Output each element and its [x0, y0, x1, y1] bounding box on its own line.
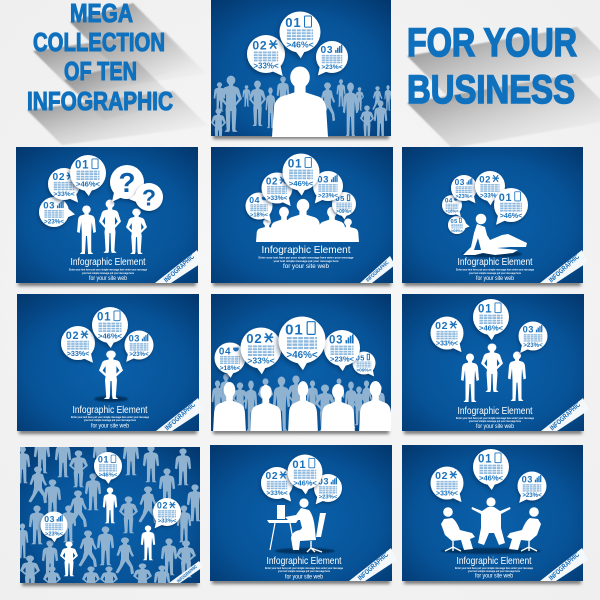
bubble 02: >33%< — [480, 192, 500, 199]
bubble 03: 03 — [320, 45, 333, 56]
bubble 01: 01 — [288, 157, 302, 171]
corner ribbon: INFOGRAPHIC — [176, 564, 199, 584]
bubble 05: 05 — [356, 353, 365, 362]
bubble 02: 02 — [435, 470, 448, 482]
bubble 01: 01 — [97, 312, 111, 324]
bubble 03 — [314, 474, 342, 504]
bubble 02 — [430, 466, 464, 502]
bubble 03: >23%< — [455, 194, 473, 200]
panel: single figure — [17, 294, 204, 434]
bubble 02: >33%< — [67, 350, 89, 358]
caption: your text simple message put your message here — [469, 271, 521, 275]
bubble 01 — [288, 454, 322, 494]
bubble 05: 05 — [335, 194, 345, 203]
caption: your text simple message put your message here — [82, 271, 134, 275]
panel: top crowd with large figure — [211, 0, 392, 143]
panel: person at desk — [210, 445, 397, 584]
bubble 02: >33%< — [267, 195, 288, 202]
bubble 03: >23%< — [321, 64, 343, 71]
bubble 01 — [473, 299, 509, 340]
bubble 02 — [262, 172, 292, 206]
bubble 04: >18%< — [220, 365, 241, 372]
bubble 03: 03 — [129, 334, 140, 344]
bubble 02: 02 — [52, 172, 65, 183]
bubble 02 — [247, 35, 285, 76]
bubble 03: >23%< — [330, 355, 355, 364]
bubble 02: 02 — [252, 38, 267, 52]
bubble 01 — [494, 188, 528, 225]
long shadow: right heading — [407, 27, 600, 148]
bubble 02: 02 — [265, 471, 278, 482]
corner ribbon: INFOGRAPHIC — [549, 402, 582, 432]
bubble 01: 01 — [75, 160, 89, 172]
figures — [77, 200, 147, 254]
bubble 02: >33%< — [253, 61, 279, 70]
bubble 03 — [39, 197, 75, 227]
bubble 01: >46%< — [500, 212, 522, 220]
bubble 02: >33%< — [53, 191, 75, 198]
bubble 03 — [124, 330, 154, 362]
crowd silhouettes — [211, 76, 391, 136]
caption: for your site web — [476, 276, 515, 282]
bubble 01 — [94, 452, 122, 484]
bubble 01: 01 — [478, 454, 492, 466]
seated figure — [463, 214, 527, 255]
left seated person — [441, 507, 475, 551]
heading: for your business — [407, 21, 577, 112]
bubble 01: 01 — [285, 321, 304, 338]
bubble 03: 03 — [44, 514, 55, 524]
bubble 01: >46%< — [99, 473, 118, 479]
caption: Enter your text here put your simple message here enter your message — [69, 268, 147, 272]
bubble 01: 01 — [285, 15, 301, 30]
caption — [69, 256, 147, 282]
caption — [455, 555, 533, 580]
heading: mega collection of ten infographic: OF TEN — [64, 56, 137, 86]
bubble question small — [129, 183, 163, 211]
bubble 01: 01 — [292, 459, 306, 471]
bubble 02 — [61, 326, 95, 363]
bubble 05 — [448, 216, 470, 234]
bubble 01: 01 — [478, 304, 492, 316]
bubble 03: >23%< — [45, 531, 64, 537]
caption — [258, 244, 354, 270]
caption: your text simple message put your message here — [278, 569, 330, 573]
bubble 01 — [473, 449, 509, 490]
figure — [99, 350, 123, 399]
bubble 05 — [332, 192, 356, 219]
bubble 02: >33%< — [436, 341, 458, 348]
panel: five busts — [211, 147, 395, 286]
large white figure — [272, 66, 328, 137]
caption: your text simple message put your message here — [468, 569, 520, 573]
bubble 05: 05 — [451, 219, 458, 225]
figures — [256, 199, 359, 242]
bubble 02: 02 — [157, 501, 168, 511]
caption — [456, 256, 534, 282]
bubble 01 — [70, 155, 106, 196]
bubble 05: >09%< — [356, 368, 372, 374]
bubble 02: 02 — [266, 176, 278, 187]
bubble 01 — [280, 12, 320, 58]
caption: Infographic Element — [262, 244, 351, 256]
caption: your text simple message put your message here — [274, 259, 339, 263]
figure shadow — [94, 396, 128, 402]
panel: three figures with question marks — [16, 147, 203, 286]
corner ribbon: INFOGRAPHIC — [163, 254, 196, 284]
caption: Infographic Element — [266, 555, 342, 567]
bubble 01 — [278, 316, 326, 370]
bubble question small: ? — [142, 184, 156, 210]
caption: Infographic Element — [456, 555, 532, 567]
bubble 01: >46%< — [98, 332, 123, 341]
bubble 03: >23%< — [44, 218, 64, 225]
bubble 01: >46%< — [293, 478, 317, 487]
corner ribbon: INFOGRAPHIC — [357, 552, 390, 582]
bubble 03: 03 — [522, 475, 533, 485]
right seated person — [507, 507, 541, 551]
bubble 02: 02 — [479, 174, 491, 185]
bubble 02 — [48, 168, 80, 203]
bubble 03: >23%< — [319, 495, 338, 501]
caption: for your site web — [475, 574, 514, 580]
bubble 03: 03 — [455, 177, 465, 187]
bubble question large — [110, 165, 144, 202]
panel: pattern of figures — [20, 447, 202, 588]
bubble 03 — [324, 330, 360, 371]
caption: for your site web — [283, 264, 330, 270]
caption: Enter your text here put your simple message here enter your message — [456, 268, 534, 272]
bubble 01: >46%< — [479, 324, 504, 333]
bubble 03: 03 — [329, 335, 343, 347]
bubble 04: 04 — [249, 195, 260, 205]
corner ribbon: INFOGRAPHIC — [164, 402, 197, 432]
bubble 03: >23%< — [522, 492, 542, 499]
bubble 03: 03 — [523, 325, 534, 335]
panel: three people in meeting — [402, 445, 588, 584]
floor shadow — [441, 548, 541, 554]
bubble 02 — [153, 498, 181, 528]
bubble 01: 01 — [98, 455, 109, 465]
corner ribbon: INFOGRAPHIC — [365, 260, 391, 284]
bubble 03: 03 — [43, 200, 55, 211]
long shadow: left heading — [27, 3, 208, 145]
bubble 04: >18%< — [250, 212, 269, 218]
corner ribbon: INFOGRAPHIC — [548, 254, 581, 284]
bubble 03 — [40, 512, 68, 542]
caption: Enter your text here put your simple message here enter your message — [265, 566, 343, 570]
bubble 01: >46%< — [286, 40, 314, 50]
bubble 01: >46%< — [76, 180, 101, 189]
bubble 02: 02 — [66, 330, 79, 342]
bubble 02: >33%< — [158, 519, 177, 525]
bubble 01 — [282, 154, 320, 196]
bubble 04 — [442, 195, 462, 217]
seated worker and chair — [285, 498, 326, 552]
corner ribbon: INFOGRAPHIC — [548, 552, 581, 582]
panel: three standing figures — [402, 294, 589, 434]
bubble 03: >23%< — [318, 192, 338, 199]
bubble 05: >09%< — [336, 209, 352, 215]
bubble 02 — [430, 316, 464, 352]
bubble 03 — [518, 322, 548, 353]
bubble 05: >09%< — [451, 229, 464, 233]
background crowd — [212, 373, 385, 431]
caption: Enter your text here put your simple message here enter your message — [455, 566, 533, 570]
bubble 03 — [451, 175, 477, 203]
heading: mega collection of ten infographic: COLLECTION — [33, 27, 165, 57]
caption: for your site web — [89, 276, 128, 282]
caption: Enter your text here put your simple message here enter your message — [258, 256, 354, 260]
caption: Infographic Element — [70, 256, 146, 268]
caption: for your site web — [91, 424, 130, 430]
bubble 03: >23%< — [523, 342, 543, 349]
bubble 01 — [92, 307, 128, 348]
white figures — [60, 487, 155, 576]
bubble question large: ? — [118, 167, 136, 198]
bubble 02: >33%< — [247, 356, 275, 366]
desk and computer — [267, 505, 298, 550]
panel: seated figure — [402, 147, 588, 286]
bubble 02 — [240, 328, 282, 374]
panel: large crowd — [211, 294, 392, 434]
bubble 02: >33%< — [266, 490, 288, 497]
bubble 04: 04 — [219, 346, 231, 357]
caption — [456, 405, 534, 430]
foreground figures — [213, 381, 392, 434]
caption: Infographic Element — [458, 256, 533, 268]
bubble 03 — [313, 171, 343, 203]
bubble 01: 01 — [499, 192, 512, 204]
crowd pattern — [20, 447, 200, 583]
floor shadow — [275, 548, 335, 554]
caption: Enter your text here put your simple message here enter your message — [71, 415, 149, 419]
bubble 01: >46%< — [286, 350, 318, 361]
bubble 02: 02 — [246, 331, 262, 346]
bubble 05 — [352, 352, 376, 376]
bubble 03: 03 — [317, 174, 329, 185]
bubble 04 — [214, 342, 246, 378]
caption — [71, 404, 149, 430]
bubble 03 — [316, 41, 348, 76]
heading: mega collection of ten infographic — [27, 0, 173, 116]
caption: your text simple message put your message here — [84, 418, 136, 422]
bubble 04: >18%< — [445, 209, 459, 214]
caption — [265, 555, 343, 580]
bubble 04 — [246, 192, 272, 222]
caption: for your site web — [476, 424, 515, 430]
bubble 01: >46%< — [479, 474, 504, 483]
bubble 02: >33%< — [436, 491, 458, 498]
centre person — [472, 497, 510, 545]
bubble 01: >46%< — [289, 179, 314, 188]
bubble 02 — [261, 467, 293, 502]
heading: mega collection of ten infographic: INFOGRAPHIC — [27, 86, 173, 116]
caption: your text simple message put your message here — [469, 419, 521, 423]
figures — [461, 344, 526, 402]
seated figure shadow — [462, 250, 522, 258]
bubble 03 — [518, 472, 546, 503]
caption: Infographic Element — [72, 404, 148, 416]
bubble 03: >23%< — [129, 351, 149, 358]
caption: for your site web — [285, 574, 324, 580]
bubble 02: 02 — [435, 320, 448, 332]
caption: Infographic Element — [458, 405, 533, 417]
bubble 02 — [475, 171, 505, 205]
caption: Enter your text here put your simple message here enter your message — [456, 416, 534, 420]
bubble 04: 04 — [445, 198, 453, 205]
bubble 03: 03 — [318, 477, 329, 487]
